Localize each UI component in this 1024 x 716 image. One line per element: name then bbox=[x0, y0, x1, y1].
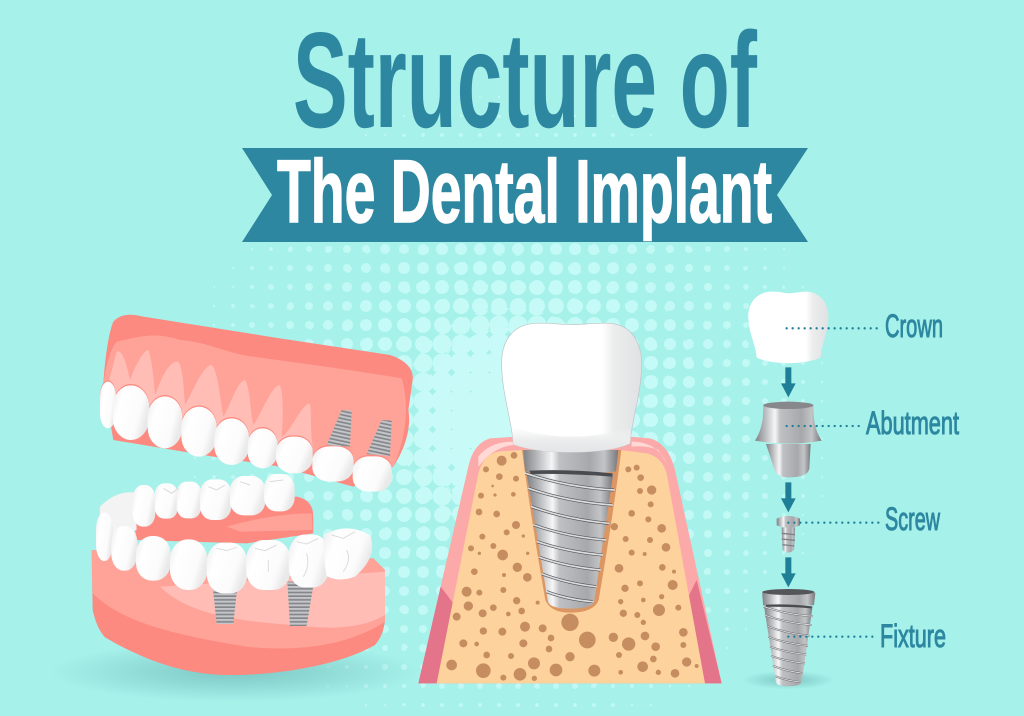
banner ribbon bbox=[242, 148, 808, 242]
label: screw: Screw bbox=[885, 501, 941, 537]
halftone dot pattern bbox=[185, 95, 835, 716]
shadow under fixture bbox=[742, 671, 835, 689]
lower back teeth bbox=[99, 474, 295, 537]
abutment part bbox=[755, 402, 822, 477]
bone and implant cross-section bbox=[418, 323, 722, 683]
screw part bbox=[777, 516, 800, 553]
arrow: screw to fixture bbox=[781, 557, 796, 587]
banner with heading bbox=[242, 141, 808, 242]
arrow: crown to abutment bbox=[781, 367, 796, 397]
label: crown: Crown bbox=[885, 308, 943, 344]
implant screw bbox=[523, 450, 618, 609]
leader dots bbox=[787, 328, 882, 637]
lower front teeth bbox=[96, 513, 372, 593]
labels bbox=[866, 308, 959, 654]
gum tissue bbox=[418, 437, 722, 683]
crown bbox=[502, 323, 642, 452]
dentures illustration bbox=[92, 315, 413, 675]
lower implant posts bbox=[213, 582, 314, 626]
upper denture gum bbox=[100, 315, 413, 490]
component stack bbox=[742, 292, 882, 689]
arrow: abutment to screw bbox=[781, 482, 796, 512]
upper implant posts bbox=[327, 410, 392, 456]
bone pores bbox=[446, 452, 699, 681]
implant socket bbox=[522, 450, 621, 613]
lower denture gum bbox=[92, 497, 385, 675]
upper teeth bbox=[100, 382, 392, 492]
crown part bbox=[748, 292, 828, 363]
bone bbox=[437, 450, 705, 683]
label: fixture: Fixture bbox=[880, 618, 946, 654]
label: abutment: Abutment bbox=[866, 405, 959, 441]
fixture part bbox=[762, 589, 815, 686]
shadow under dentures bbox=[50, 642, 420, 702]
